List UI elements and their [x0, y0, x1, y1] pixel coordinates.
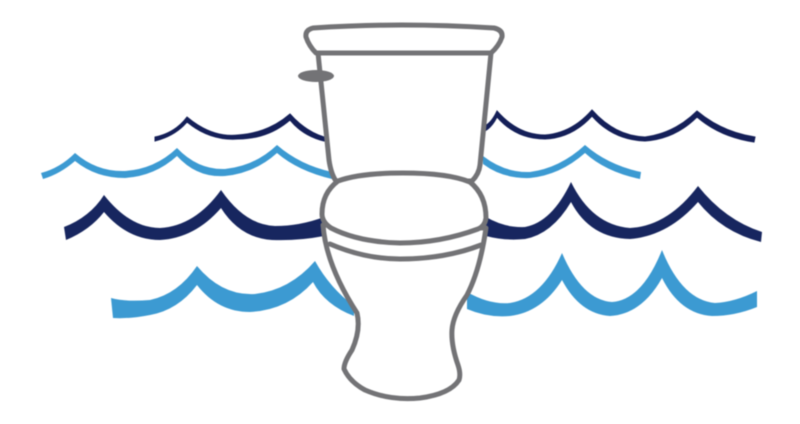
bowl base [323, 225, 486, 399]
toilet [298, 25, 502, 399]
wave: thin navy, top row [155, 110, 755, 142]
wave: thick navy, third row [64, 182, 762, 242]
toilet seat [322, 173, 486, 243]
wave: thin light blue, second row [41, 145, 641, 179]
toilet tank [318, 53, 491, 181]
flush handle [298, 70, 334, 82]
tank lid [306, 25, 502, 53]
seat lip line [330, 244, 481, 259]
wave: thick light blue, bottom row [111, 250, 757, 318]
